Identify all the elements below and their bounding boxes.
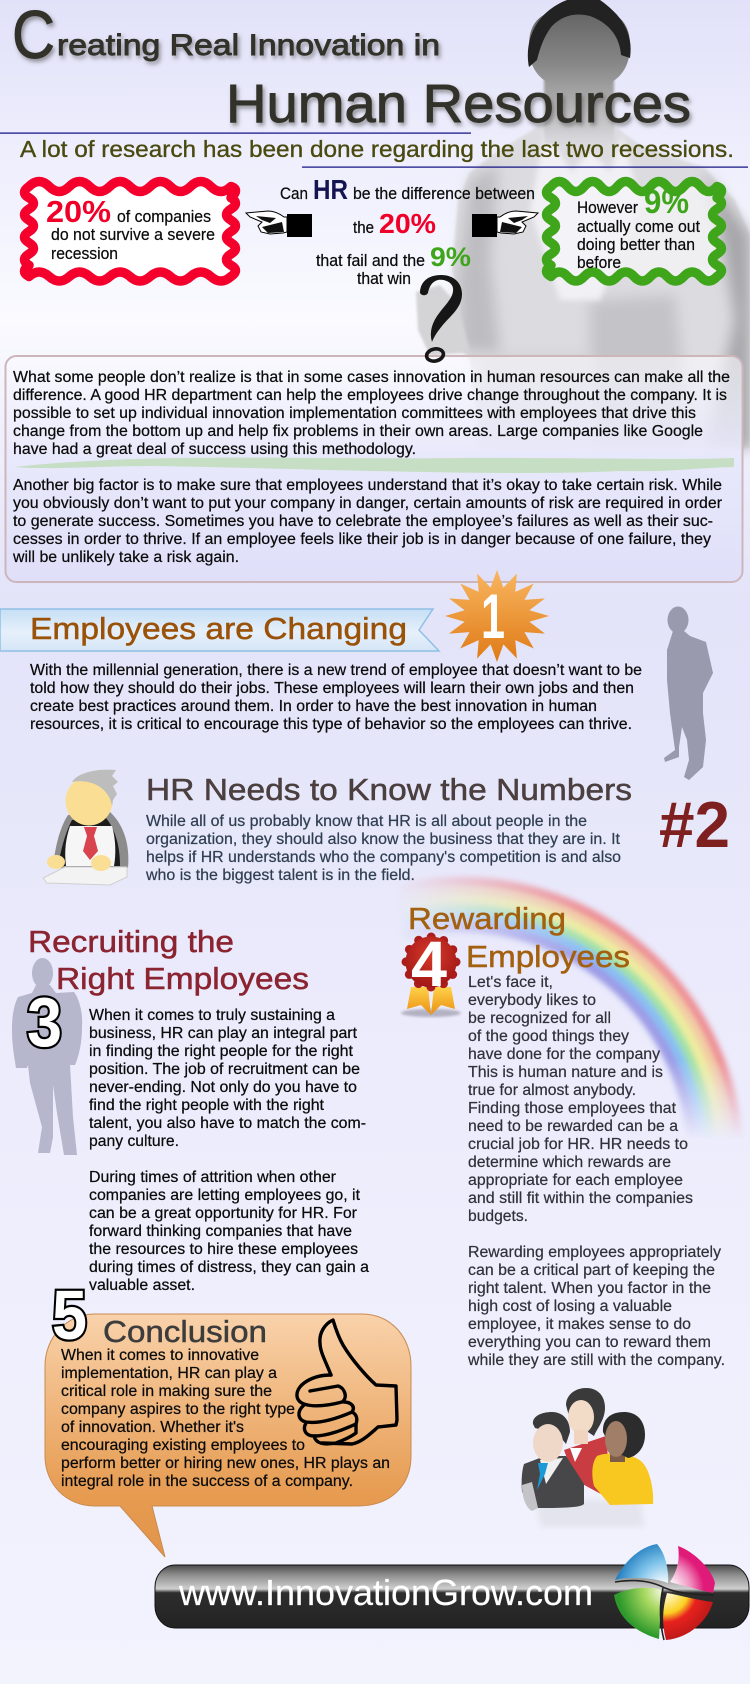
intro text panel: cesses in order to thrive. If an employee feels like their job is in danger because of one failure, they xyxy=(13,531,711,548)
section 1 body text xyxy=(30,662,642,733)
callout: 9% win: 9% xyxy=(644,183,689,220)
callout: 9% win: before xyxy=(577,253,621,272)
conclusion body text: integral role in the success of a company. xyxy=(61,1473,353,1490)
center question text xyxy=(280,174,535,288)
title: reating Real Innovation in xyxy=(57,29,440,62)
section 1 banner: Employees are Changing xyxy=(30,611,407,646)
center question text: HR xyxy=(313,174,348,205)
section 4 heading xyxy=(408,901,630,974)
section 3 body text: During times of attrition when other xyxy=(89,1169,336,1186)
number 4 ribbon badge xyxy=(401,928,461,1017)
section 2 heading: HR Needs to Know the Numbers xyxy=(146,772,632,807)
title xyxy=(12,0,691,134)
number 5: 5 xyxy=(52,1276,87,1354)
callout: 20% fail: do not survive a severe xyxy=(51,225,215,244)
conclusion body text xyxy=(61,1347,390,1490)
section 4 body text: appropriate for each employee xyxy=(468,1172,683,1189)
callout: 20% fail: of companies xyxy=(117,207,211,226)
intro text panel: change from the bottom up and help fix problems in their own areas. Large companies like Google xyxy=(13,423,703,440)
section 4 body text: true for almost anybody. xyxy=(468,1082,636,1099)
section 3 body text: companies are letting employees go, it xyxy=(89,1187,361,1204)
section 2 body text: who is the biggest talent is in the field. xyxy=(145,867,415,884)
section 4 body text: Finding those employees that xyxy=(468,1100,677,1117)
section 4 body text: and still fit within the companies xyxy=(468,1190,693,1207)
website footer bar: www.InnovationGrow.com xyxy=(178,1572,593,1613)
icon: group of three people xyxy=(522,1388,653,1527)
conclusion speech bubble xyxy=(45,1314,411,1557)
icon: thumbs up xyxy=(297,1320,397,1444)
section 4 body text: Let's face it, xyxy=(468,974,553,991)
section 3 body text: find the right people with the right xyxy=(89,1097,325,1114)
number 1 starburst xyxy=(445,570,549,662)
section 3 body text: never-ending. Not only do you have to xyxy=(89,1079,357,1096)
section 3 body text: business, HR can play an integral part xyxy=(89,1025,358,1042)
section 1 body text: create best practices around them. In order to have the best innovation in human xyxy=(30,698,597,715)
section 4 body text: everybody likes to xyxy=(468,992,596,1009)
section 2 body text: helps if HR understands who the company's competition is and also xyxy=(146,849,621,866)
center question text: 20% xyxy=(379,208,436,239)
intro text panel xyxy=(6,356,742,582)
section 4 body text: right talent. When you factor in the xyxy=(468,1280,711,1297)
icon: office worker at keyboard xyxy=(43,770,128,885)
section 3 body text: forward thinking companies that have xyxy=(89,1223,352,1240)
number 3: 3 xyxy=(27,983,62,1061)
intro text panel: Another big factor is to make sure that employees understand that it’s okay to take certain risk. While xyxy=(13,477,722,494)
icon: four-colour logo sphere xyxy=(614,1544,715,1640)
section 3 body text: position. The job of recruitment can be xyxy=(89,1061,360,1078)
section 3 body text: talent, you also have to match the com- xyxy=(89,1115,366,1132)
section 2 body text: While all of us probably know that HR is all about people in the xyxy=(146,813,587,830)
section 3 body text: the resources to hire these employees xyxy=(89,1241,358,1258)
center question text: Can xyxy=(280,184,308,203)
conclusion body text: company aspires to the right type xyxy=(61,1401,295,1418)
conclusion body text: of innovation. Whether it's xyxy=(61,1419,244,1436)
section 3 body text: in finding the right people for the right xyxy=(89,1043,354,1060)
section 1 body text: resources, it is critical to encourage this type of behavior so the employees can thrive. xyxy=(30,716,632,733)
section 4 body text: while they are still with the company. xyxy=(467,1352,725,1369)
number 2: #2 xyxy=(659,788,730,861)
section 4 heading: Employees xyxy=(466,939,630,974)
icon: question mark xyxy=(420,275,462,363)
intro text panel: you obviously don’t want to put your company in danger, certain amounts of risk are required in order xyxy=(13,495,722,512)
number 1 starburst: 1 xyxy=(481,582,505,652)
woman in red, centre xyxy=(564,1388,612,1500)
section 4 heading: Rewarding xyxy=(408,901,566,936)
rainbow xyxy=(410,874,742,1134)
section 2 body text: organization, they should also know the business that they are in. It xyxy=(146,831,621,848)
section 4 body text: crucial job for HR. HR needs to xyxy=(468,1136,688,1153)
callout: 20% fail xyxy=(25,182,236,281)
section 2 body text xyxy=(145,813,621,884)
section 3 heading: Recruiting the xyxy=(28,924,234,959)
section 3 body text xyxy=(89,1007,369,1294)
center question text: be the difference between xyxy=(353,184,535,203)
center question text: 9% xyxy=(430,242,471,272)
section 3 body text: When it comes to truly sustaining a xyxy=(89,1007,335,1024)
section 4 body text: determine which rewards are xyxy=(468,1154,671,1171)
section 4 body text xyxy=(467,974,725,1369)
section 4 body text: everything you can to reward them xyxy=(468,1334,711,1351)
intro text panel: will be unlikely take a risk again. xyxy=(12,549,239,566)
section 3 body text: valuable asset. xyxy=(89,1277,195,1294)
section 4 body text: have done for the company xyxy=(468,1046,660,1063)
section 3 body text: pany culture. xyxy=(89,1133,179,1150)
icon: hand pointing left xyxy=(246,211,312,237)
callout: 9% win xyxy=(546,182,721,281)
section 4 body text: employee, it makes sense to do xyxy=(468,1316,691,1333)
section 4 body text: This is human nature and is xyxy=(468,1064,663,1081)
conclusion speech bubble: Conclusion xyxy=(103,1314,267,1349)
silhouette: standing man xyxy=(12,958,82,1155)
silhouette: man in tuxedo xyxy=(664,606,713,780)
intro text panel: possible to set up individual innovation implementation committees with employees that drive this xyxy=(13,405,696,422)
callout: 9% win: doing better than xyxy=(577,235,695,254)
callout: 20% fail: recession xyxy=(51,244,118,263)
conclusion body text: perform better or hiring new ones, HR plays an xyxy=(61,1455,390,1472)
section 1 body text: With the millennial generation, there is a new trend of employee that doesn’t want to be xyxy=(30,662,642,679)
conclusion body text: implementation, HR can play a xyxy=(61,1365,277,1382)
callout: 9% win: actually come out xyxy=(577,217,700,236)
center question text: the xyxy=(353,218,374,237)
section 4 body text: can be a critical part of keeping the xyxy=(468,1262,715,1279)
conclusion body text: When it comes to innovative xyxy=(61,1347,259,1364)
section 4 body text: be recognized for all xyxy=(468,1010,611,1027)
man in suit, left xyxy=(522,1412,584,1511)
woman in yellow, right xyxy=(592,1412,653,1505)
intro text panel: What some people don’t realize is that in some cases innovation in human resources can make all the xyxy=(13,369,730,386)
section 4 body text: Rewarding employees appropriately xyxy=(468,1244,721,1261)
subtitle with rules: A lot of research has been done regarding the last two recessions. xyxy=(20,136,734,162)
conclusion body text: encouraging existing employees to xyxy=(61,1437,305,1454)
section 4 body text: budgets. xyxy=(468,1208,528,1225)
number 4 ribbon badge: 4 xyxy=(411,928,447,1000)
decorative green swoosh xyxy=(14,458,734,473)
icon: hand pointing right xyxy=(472,211,538,237)
section 4 body text: need to be rewarded can be a xyxy=(468,1118,678,1135)
title: Human Resources xyxy=(226,74,691,134)
section 3 body text: during times of distress, they can gain a xyxy=(89,1259,369,1276)
background figure: man in suit xyxy=(416,0,750,448)
section 1 body text: told how they should do their jobs. These employees will learn their own jobs and then xyxy=(30,680,634,697)
center question text: that win xyxy=(357,269,411,288)
intro text panel: have had a great deal of success using this methodology. xyxy=(13,441,416,458)
section 4 body text: high cost of losing a valuable xyxy=(468,1298,672,1315)
section 4 body text: of the good things they xyxy=(468,1028,629,1045)
callout: 9% win: However xyxy=(577,198,638,217)
website footer bar xyxy=(155,1565,749,1628)
conclusion body text: critical role in making sure the xyxy=(61,1383,272,1400)
callout: 20% fail: 20% xyxy=(46,194,111,229)
intro text panel: to generate success. Sometimes you have to celebrate the employee’s failures as well as their suc- xyxy=(13,513,713,530)
section 3 body text: can be a great opportunity for HR. For xyxy=(89,1205,357,1222)
section 3 heading second line: Right Employees xyxy=(56,961,309,996)
section 1 banner xyxy=(0,609,439,651)
center question text: that fail and the xyxy=(316,251,425,270)
intro text panel: difference. A good HR department can help the employees drive change throughout the company. It is xyxy=(13,387,727,404)
